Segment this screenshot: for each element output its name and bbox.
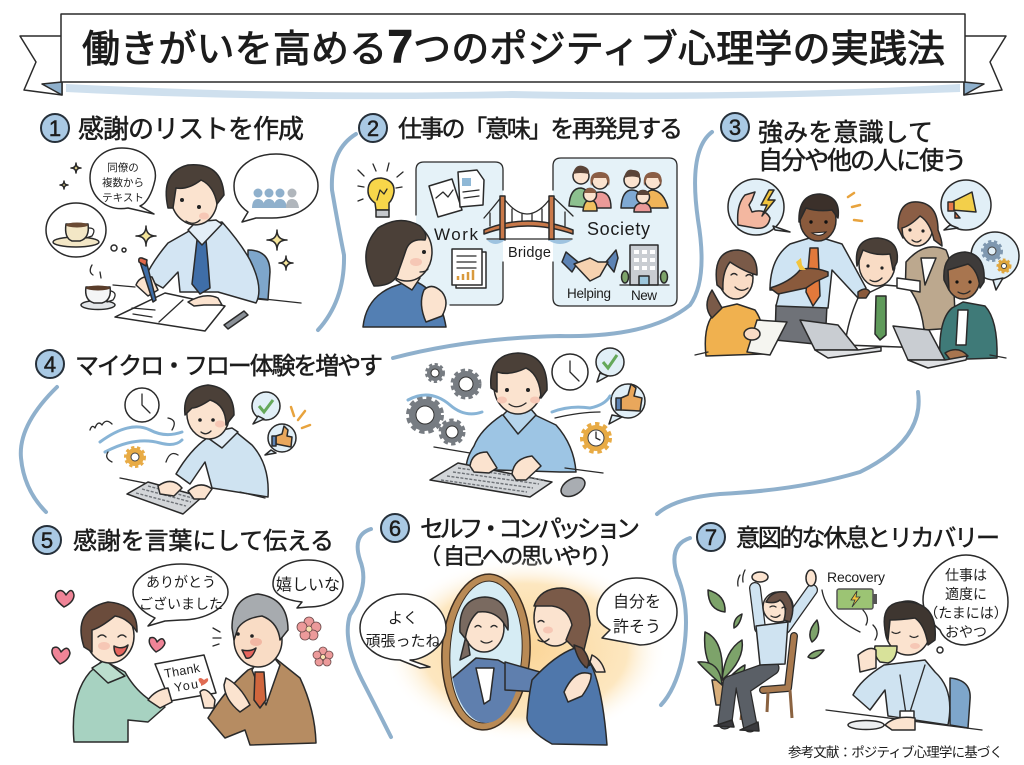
heading 6: [381, 514, 640, 569]
flow icons right: [408, 348, 645, 451]
speech bubble: glad: [273, 560, 343, 608]
bubble: forgive: 自分を: [613, 593, 661, 611]
bubble: snack: おやつ: [945, 624, 987, 640]
curved dividers: [21, 132, 919, 737]
man thinking: [363, 220, 446, 327]
mirror: [438, 572, 534, 732]
section 7: rest and recovery: [697, 523, 1008, 731]
recovery battery: [827, 569, 885, 609]
footer reference: 参考文献：ポジティブ心理学に基づく: [788, 744, 1003, 760]
section 4: micro flow: [36, 348, 645, 514]
heading 4: マイクロ・フロー体験を増やす: [75, 353, 383, 380]
bubble: snack: （たまには）: [924, 605, 1008, 621]
panel: society: Helping: [567, 286, 611, 301]
icon: lightbulb: [358, 163, 403, 217]
bubble: snack: [923, 555, 1008, 653]
heading 6: 6: [389, 516, 401, 541]
flow man left: [120, 385, 268, 514]
flow man right: [430, 353, 603, 500]
bubble: well done: 頑張ったね: [365, 633, 441, 650]
bubble: snack: 仕事は: [945, 567, 987, 583]
laptops: [695, 320, 1006, 368]
sparkles: [60, 163, 293, 270]
heading 2: 2: [367, 116, 379, 141]
heading 7: 意図的な休息とリカバリー: [736, 525, 1000, 552]
bubble: note: テキスト: [102, 192, 144, 204]
speech bubble: thanks: ありがとう: [146, 574, 216, 590]
heading 3: 自分や他の人に使う: [758, 147, 967, 175]
icon: handshake: [562, 250, 618, 281]
bubble: well done: [360, 594, 446, 668]
icon: coffee cup: [81, 265, 115, 310]
chair: [763, 636, 794, 690]
illustration: man writing at desk: [46, 148, 318, 331]
left man with card: You: [173, 677, 199, 695]
panel: society: Society: [587, 219, 650, 239]
bubble: note: [90, 148, 155, 214]
legs: [725, 668, 772, 725]
arms: [755, 588, 812, 628]
bubble: colleagues: [234, 154, 318, 222]
man drinking tea: [822, 590, 982, 730]
heading 3: 強みを意識して: [758, 119, 933, 147]
left man with card: Thank: [163, 661, 202, 681]
heading 6: 自己への思いやり: [443, 544, 601, 569]
section 5: express gratitude: [33, 526, 343, 745]
left woman: [705, 250, 787, 356]
torso: [756, 622, 788, 665]
icon: bridge: [484, 196, 573, 261]
heading 3: [721, 113, 967, 175]
hearts: [52, 590, 165, 664]
panel: society: New: [631, 288, 657, 303]
heading 4: 4: [44, 352, 56, 377]
bubble: forgive: 許そう: [613, 618, 661, 636]
older man: [200, 594, 316, 745]
back woman: [898, 202, 955, 330]
section 3: use strengths: [695, 113, 1019, 368]
title banner: 働きがいを高める7つのポジティブ心理学の実践法: [82, 20, 945, 72]
bubble: note: 複数から: [102, 176, 144, 189]
panel: work: [416, 162, 503, 305]
section 2: rediscover meaning: [358, 114, 683, 327]
bubble: coffee thought: [46, 203, 126, 257]
heading 1: 感謝のリストを作成: [78, 114, 304, 144]
heading 3: 3: [729, 115, 741, 140]
heading 6: ）: [601, 544, 623, 569]
heading 7: 7: [705, 525, 717, 550]
flowers: [297, 617, 333, 666]
icon: bridge: Bridge: [508, 245, 551, 261]
family icons: [569, 166, 668, 212]
bubble: forgive: [597, 578, 677, 645]
section 6: self compassion: [360, 514, 677, 745]
bubble: well done: よく: [388, 610, 418, 627]
left man with card: [73, 602, 216, 742]
man pointing: [770, 193, 866, 345]
flow icons left: [90, 388, 310, 466]
stretching person: [714, 570, 816, 731]
heading 6: セルフ・コンパッション: [420, 516, 640, 543]
bubble: snack: 適度に: [945, 586, 987, 602]
heading 6: （: [419, 544, 441, 569]
speech bubble: thanks: [133, 564, 228, 626]
bubble: note: 同僚の: [107, 161, 139, 174]
panel: society: [553, 158, 677, 306]
speech bubble: thanks: ございました: [139, 596, 223, 612]
heading 5: 5: [41, 528, 53, 553]
speech bubble: glad: 嬉しいな: [276, 576, 340, 594]
heading 1: 1: [49, 116, 61, 141]
right woman: [940, 252, 997, 362]
plant and leaves: [698, 590, 824, 705]
center man: [845, 238, 925, 348]
recovery battery: Recovery: [827, 569, 885, 585]
bubbles: strength icons: [728, 179, 1019, 290]
title banner: [20, 14, 1006, 99]
section 1: gratitude list: [41, 114, 318, 331]
heading 5: 感謝を言葉にして伝える: [73, 528, 334, 555]
warm glow: [383, 558, 667, 742]
icon: building: [620, 245, 669, 285]
heading 2: 仕事の「意味」を再発見する: [398, 116, 683, 143]
woman with hand on shoulder: [505, 588, 607, 745]
panel: work: Work: [434, 225, 478, 244]
